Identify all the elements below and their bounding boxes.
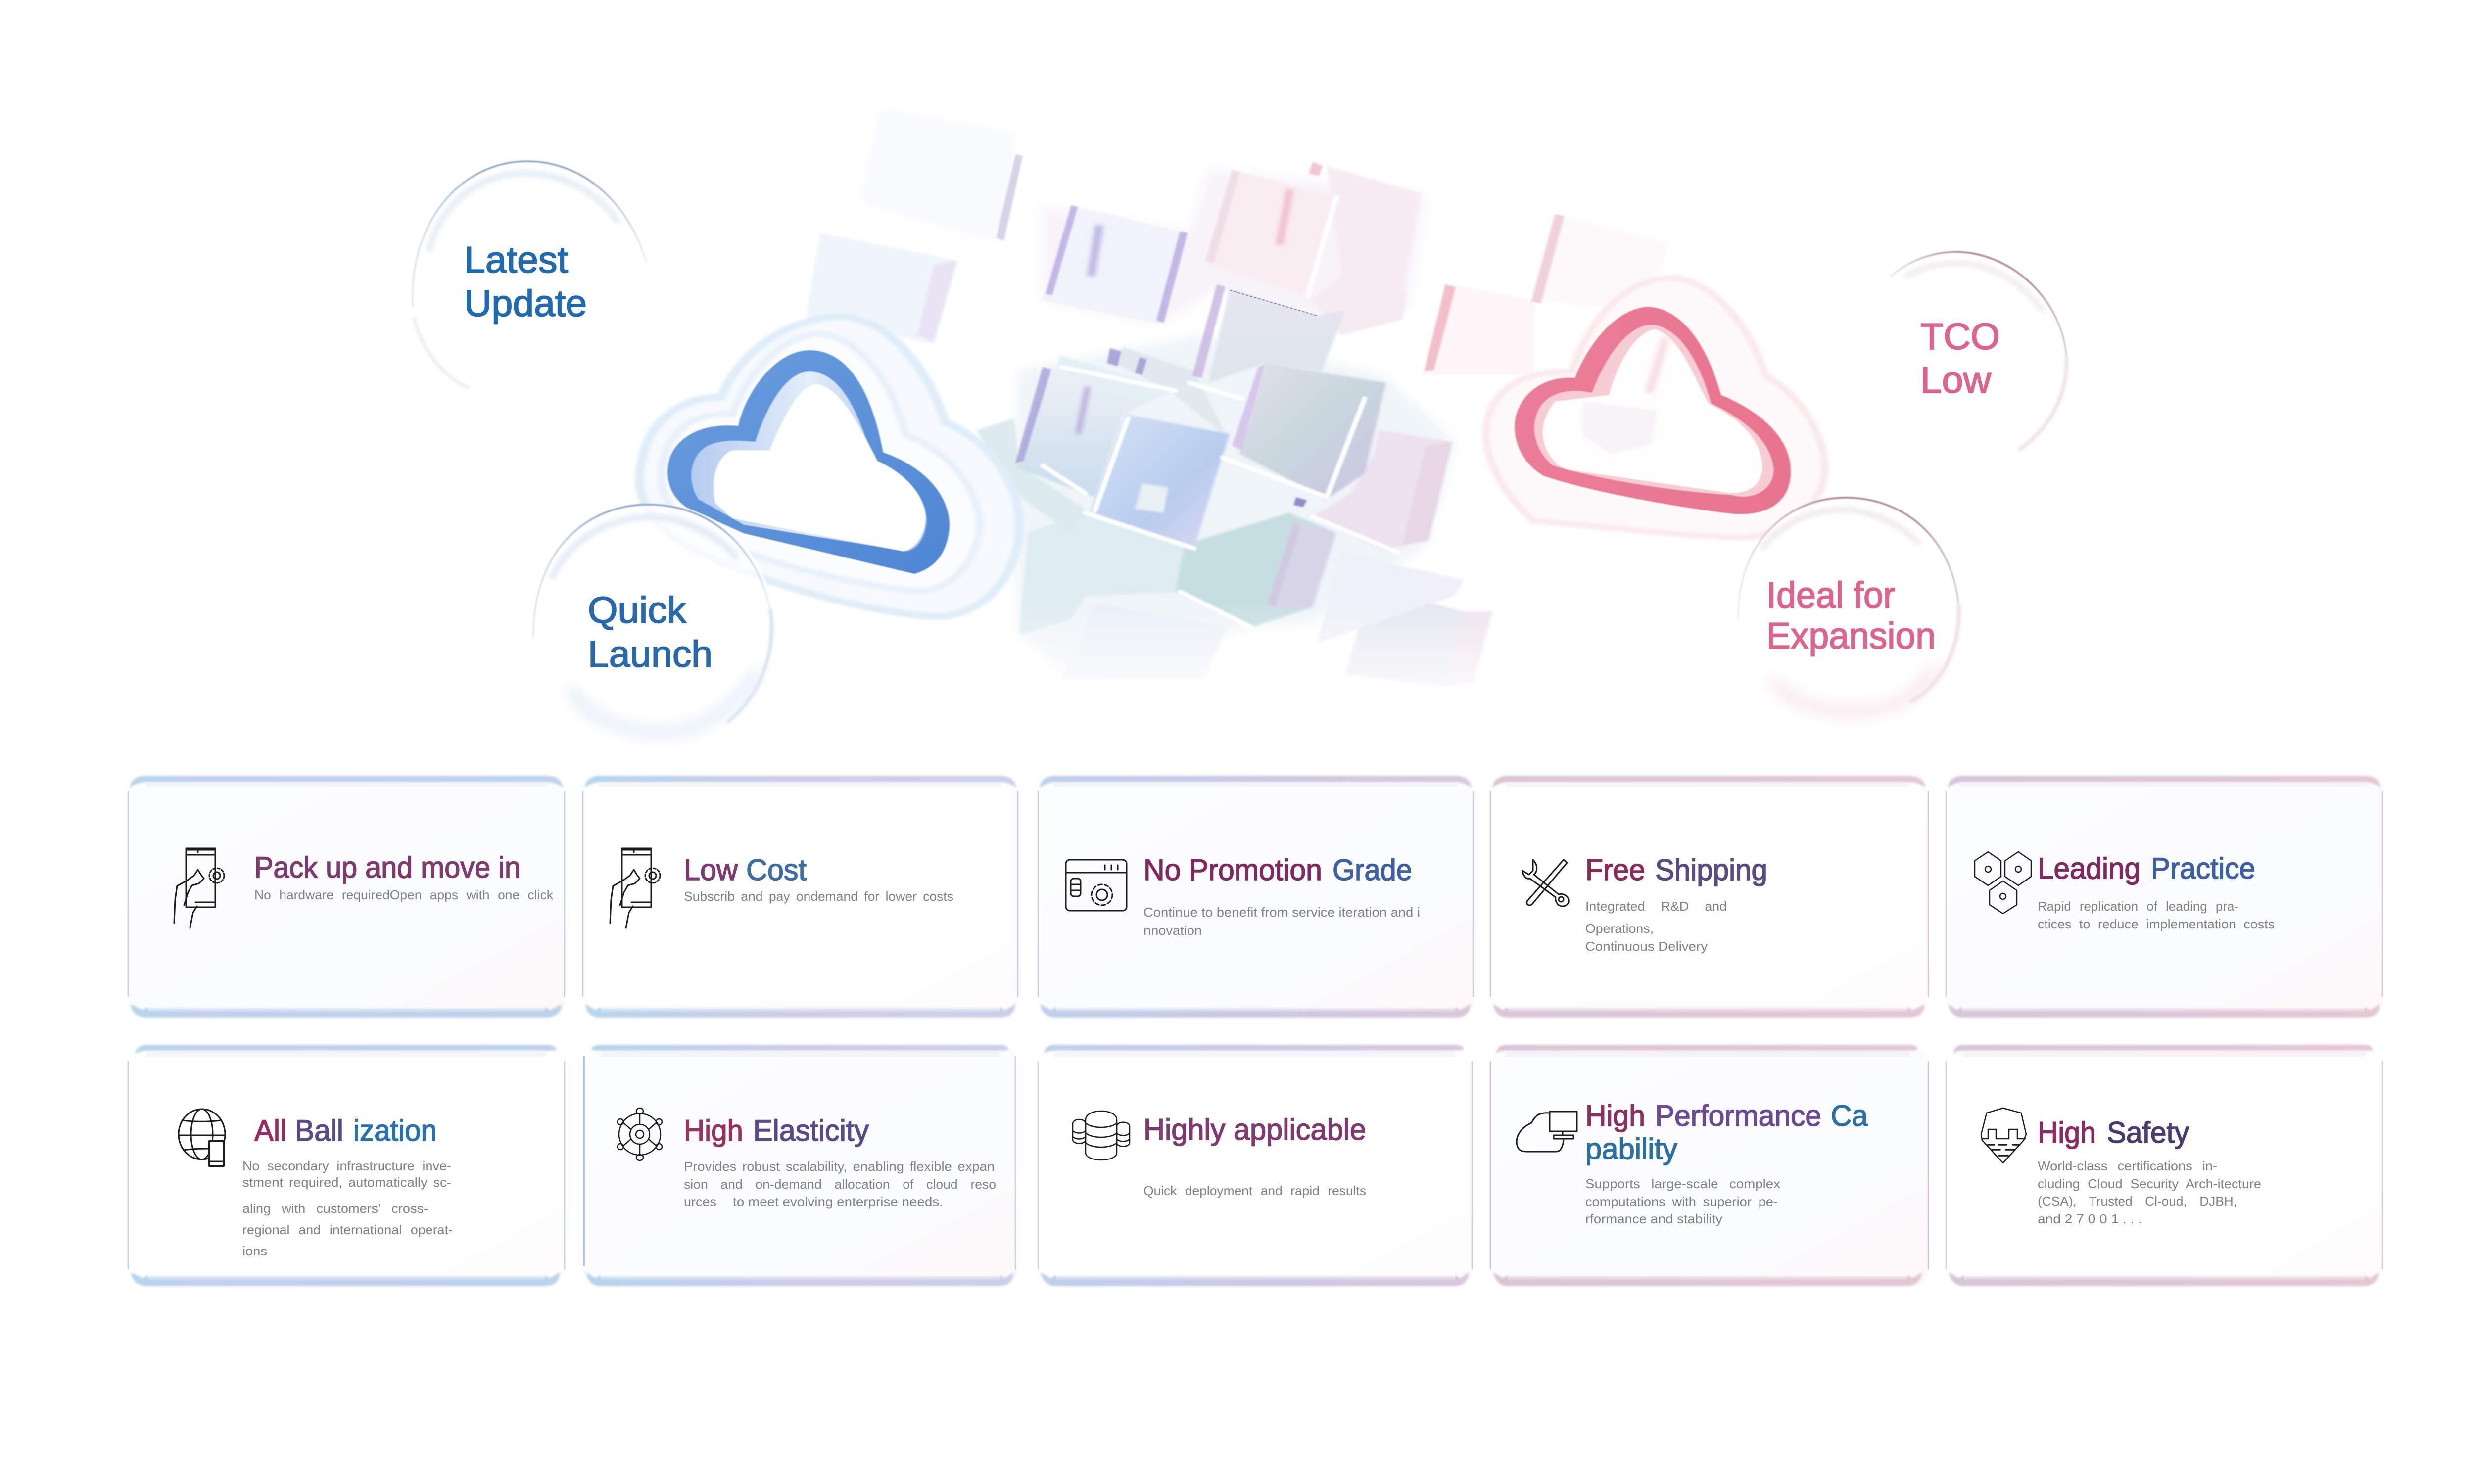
- callout: Quick Launch: Launch: [588, 633, 713, 675]
- description: [2038, 1159, 2261, 1226]
- panel: Free Shipping: [1490, 776, 1928, 1018]
- callout: TCO Low: TCO: [1920, 316, 2000, 357]
- description: No secondary infrastructure inve-: [242, 1159, 451, 1173]
- card frame: [1490, 1045, 1928, 1286]
- description: Supports large-scale complex: [1585, 1176, 1780, 1191]
- hero: glass cubes: [806, 111, 1534, 710]
- heading: [2038, 852, 2255, 885]
- description: nnovation: [1143, 923, 1202, 938]
- heading: Leading: [2038, 852, 2141, 885]
- card frame: [1946, 776, 2383, 1018]
- description: sion and on-demand allocation of cloud reso: [684, 1177, 996, 1192]
- panel: High Safety: [1946, 1045, 2383, 1286]
- heading: High: [684, 1114, 743, 1147]
- heading: Free: [1585, 853, 1645, 886]
- icon: cloud with monitor: [1517, 1112, 1577, 1152]
- card frame: [583, 776, 1018, 1018]
- heading: No Promotion: [1143, 853, 1322, 886]
- description: aling with customers' cross-: [242, 1201, 428, 1216]
- icon: shield: [1981, 1108, 2026, 1163]
- description: and 2 7 0 0 1 . . .: [2038, 1211, 2142, 1226]
- description: Operations,: [1585, 921, 1654, 936]
- description: Integrated R&D and: [1585, 899, 1727, 914]
- description: (CSA), Trusted Cl-oud, DJBH,: [2038, 1194, 2237, 1208]
- callout: TCO Low: Low: [1920, 359, 1992, 401]
- heading: pability: [1585, 1132, 1677, 1165]
- heading: Low: [684, 853, 738, 886]
- heading: High: [1585, 1099, 1645, 1132]
- panel: Pack up and move in: [128, 776, 565, 1018]
- panel: High Elasticity: [583, 1045, 1018, 1286]
- fade: [934, 603, 1534, 710]
- description: rformance and stability: [1585, 1211, 1722, 1226]
- icon: crossed wrench and screwdriver: [1522, 860, 1569, 906]
- icon: three hexagons: [1975, 852, 2031, 914]
- heading: Performance: [1655, 1099, 1821, 1132]
- icon: browser window with database and gear: [1066, 860, 1127, 911]
- heading: All: [254, 1114, 286, 1147]
- panel: High Performance Capability: [1490, 1045, 1928, 1286]
- card frame: [1038, 776, 1474, 1018]
- card frame: [128, 1045, 565, 1286]
- description: Continuous Delivery: [1585, 939, 1708, 954]
- card frame: [1490, 776, 1928, 1018]
- icon: pink glass cloud: [1486, 278, 1825, 538]
- description: [684, 1159, 996, 1209]
- description: cluding Cloud Security Arch-itecture: [2038, 1176, 2261, 1191]
- heading: [684, 1114, 869, 1147]
- callout: Latest Update: Update: [464, 282, 587, 324]
- heading: Shipping: [1655, 853, 1767, 886]
- callout: Ideal for Expansion: [1737, 497, 1959, 715]
- description: Subscrib and pay ondemand for lower costs: [684, 889, 953, 904]
- description: Continue to benefit from service iteration and i: [1143, 905, 1420, 920]
- panel: All Ball ization: [128, 1045, 565, 1286]
- card frame: [583, 1045, 1018, 1286]
- icon: hand holding phone: [610, 848, 660, 928]
- heading: [684, 853, 807, 886]
- description: [2038, 899, 2275, 931]
- card frame: [1038, 1045, 1474, 1286]
- heading: Ball: [295, 1114, 343, 1147]
- callout: TCO Low: [1857, 251, 2067, 457]
- heading: Pack up and move in: [254, 851, 521, 884]
- description: World-class certifications in-: [2038, 1159, 2217, 1173]
- callout: Latest Update: [407, 160, 648, 390]
- description: urces: [684, 1194, 716, 1209]
- icon: molecule network: [618, 1108, 662, 1160]
- description: [1585, 899, 1727, 954]
- panel: No Promotion Grade: [1038, 776, 1474, 1018]
- card frame: [1946, 1045, 2383, 1286]
- heading: ization: [353, 1114, 437, 1147]
- icon: database stacks: [1073, 1111, 1130, 1160]
- heading: [1585, 853, 1767, 886]
- description: stment required, automatically sc-: [242, 1175, 451, 1190]
- description: regional and international operat-: [242, 1222, 453, 1237]
- description: to meet evolving enterprise needs.: [733, 1194, 943, 1209]
- description: [242, 1159, 453, 1258]
- icon: blue glass cloud: [639, 316, 1019, 616]
- callout: Quick Launch: Quick: [588, 589, 687, 631]
- description: ctices to reduce implementation costs: [2038, 917, 2275, 931]
- description: computations with superior pe-: [1585, 1194, 1778, 1209]
- card frame: [128, 776, 565, 1018]
- description: Provides robust scalability, enabling flexible expan: [684, 1159, 995, 1174]
- heading: Ca: [1831, 1099, 1868, 1132]
- heading: Safety: [2107, 1116, 2189, 1149]
- description: [1143, 905, 1420, 938]
- callout: Latest Update: Latest: [464, 239, 568, 280]
- panel: Highly applicable: [1038, 1045, 1474, 1286]
- callout: Ideal for Expansion: Expansion: [1766, 615, 1936, 656]
- heading: Grade: [1332, 853, 1412, 886]
- hero: far pink cube: [1531, 214, 1668, 312]
- description: No hardware requiredOpen apps with one click: [254, 887, 554, 902]
- icon: hand holding phone: [174, 848, 224, 928]
- callout: Ideal for Expansion: Ideal for: [1766, 574, 1895, 616]
- heading: Elasticity: [753, 1114, 869, 1147]
- heading: [1143, 853, 1412, 886]
- description: Quick deployment and rapid results: [1143, 1183, 1366, 1198]
- heading: Practice: [2151, 852, 2255, 885]
- description: ions: [242, 1244, 267, 1258]
- heading: High: [2038, 1116, 2096, 1149]
- heading: [254, 1114, 437, 1147]
- description: Rapid replication of leading pra-: [2038, 899, 2238, 914]
- icon: globe with phone: [179, 1109, 225, 1166]
- panel: Leading Practice: [1946, 776, 2383, 1018]
- heading: Highly applicable: [1143, 1113, 1366, 1146]
- heading: Cost: [746, 853, 807, 886]
- description: [1585, 1176, 1780, 1226]
- panel: Low Cost: [583, 776, 1018, 1018]
- heading: [1585, 1099, 1868, 1165]
- heading: [2038, 1116, 2189, 1149]
- callout: Quick Launch: [533, 504, 773, 740]
